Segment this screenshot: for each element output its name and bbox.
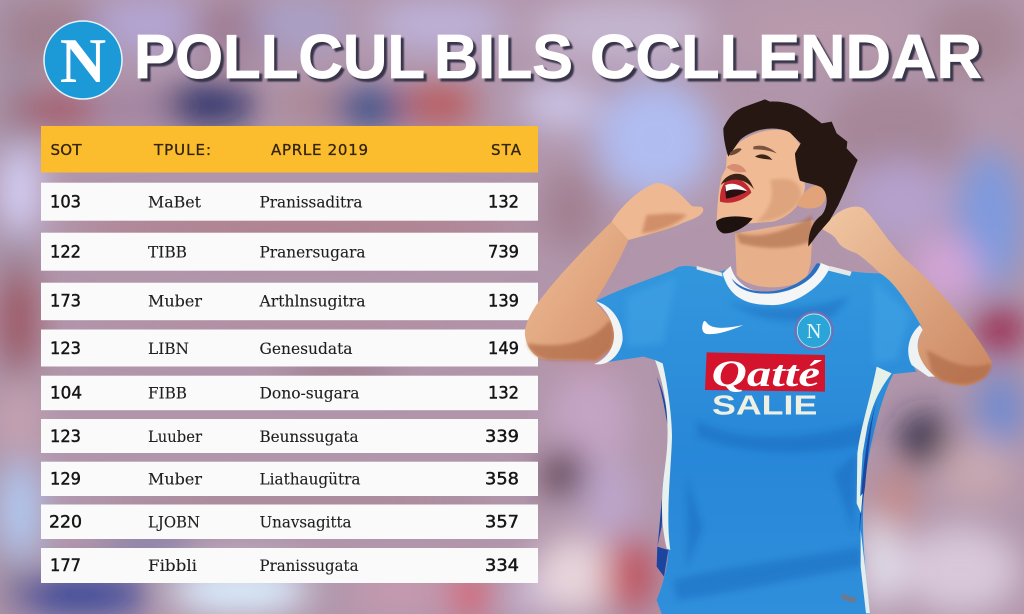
table row 7: Liathaugütra <box>260 470 361 488</box>
player beard <box>716 216 753 233</box>
jersey fabric folds <box>673 297 873 600</box>
player hair <box>723 99 858 247</box>
table header: TPULE: <box>153 141 211 159</box>
player eyes and brows <box>730 146 777 160</box>
table row 8 <box>41 504 538 539</box>
jersey sleeve highlights <box>627 277 910 363</box>
jersey swoosh logo <box>702 321 743 334</box>
table header: STA <box>491 141 522 159</box>
face shading <box>757 179 802 222</box>
player mouth <box>720 174 754 203</box>
right sleeve cuff <box>908 325 935 377</box>
table row 9: 334 <box>485 556 519 575</box>
table row 9 <box>41 548 538 583</box>
table row 2: Pranersugara <box>260 242 366 262</box>
player left arm and fist <box>525 183 703 361</box>
player celebrating in blue jersey <box>525 99 992 614</box>
table row 4: Genesudata <box>260 339 353 358</box>
table row 5: 132 <box>488 384 519 402</box>
table row 9: Pranissugata <box>260 556 359 575</box>
table row 1 <box>41 183 538 221</box>
jersey right side stripe <box>857 367 892 513</box>
jersey hem tag <box>842 593 857 603</box>
title: CCLLENDAR <box>593 26 985 95</box>
title badge: circular N logo: N <box>60 25 106 96</box>
table row 7: 129 <box>50 470 81 488</box>
player jersey <box>594 263 935 614</box>
table row 6: 123 <box>50 427 81 446</box>
table row 4 <box>41 330 538 366</box>
jersey collar <box>723 263 830 305</box>
table row 4: LIBN <box>148 339 189 358</box>
player ear <box>797 185 826 209</box>
sponsor red panel: Qatté <box>712 354 822 395</box>
jersey crest: N <box>807 321 822 343</box>
table row 3: 139 <box>488 292 519 310</box>
left sleeve cuff <box>594 301 623 364</box>
player head <box>716 99 858 247</box>
jersey shoulder stripes <box>697 266 852 277</box>
player nose <box>727 164 747 172</box>
title: BILS <box>437 26 576 95</box>
title: BILS <box>434 23 573 92</box>
table row 7: Muber <box>148 470 202 488</box>
table row 1: 103 <box>50 192 81 212</box>
table row 4: 123 <box>50 339 81 358</box>
table row 9: 177 <box>50 556 81 575</box>
table header: SOT <box>50 141 82 159</box>
sponsor red panel <box>705 352 825 395</box>
table row 7 <box>41 462 538 496</box>
title badge: circular N logo <box>44 21 122 99</box>
table header: APRLE 2019 <box>271 141 368 159</box>
table row 3 <box>41 283 538 320</box>
table row 7: 358 <box>485 470 519 488</box>
table row 8: 357 <box>485 512 519 532</box>
title: POLLCUL <box>137 26 428 95</box>
table row 3: Arthlnsugitra <box>259 292 366 310</box>
table row 8: LJOBN <box>148 512 200 532</box>
jersey left side stripe <box>655 360 672 550</box>
table row 5: Dono-sugara <box>260 384 360 402</box>
jersey crest <box>795 312 833 349</box>
table row 4: 149 <box>488 339 519 358</box>
player right arm and fist <box>819 207 992 386</box>
table row 6: Beunssugata <box>260 427 359 446</box>
title <box>134 23 985 95</box>
table row 5 <box>41 376 538 410</box>
table row 3: 173 <box>50 292 81 310</box>
table row 2: 122 <box>50 242 81 262</box>
player face <box>717 130 805 223</box>
table row 8: Unavsagitta <box>260 512 352 532</box>
table row 5: 104 <box>50 384 82 402</box>
table row 3: Muber <box>148 292 202 310</box>
table row 1: 132 <box>488 192 519 212</box>
table row 5: FIBB <box>148 384 187 402</box>
table row 2: TIBB <box>148 242 187 262</box>
table header <box>41 126 538 172</box>
table row 9: Fibbli <box>148 556 197 575</box>
table row 1: Pranissaditra <box>260 192 363 212</box>
table row 2 <box>41 233 538 271</box>
jersey dark side panels <box>657 377 877 577</box>
player neck <box>735 215 813 287</box>
table row 6 <box>41 419 538 453</box>
table row 2: 739 <box>488 242 519 262</box>
title: POLLCUL <box>134 23 425 92</box>
table row 8: 220 <box>49 512 82 532</box>
table row 1: MaBet <box>148 192 202 212</box>
title: CCLLENDAR <box>590 23 982 92</box>
sponsor text below: SALIE <box>712 389 817 420</box>
table row 6: 339 <box>485 427 519 446</box>
table row 6: Luuber <box>148 427 202 446</box>
